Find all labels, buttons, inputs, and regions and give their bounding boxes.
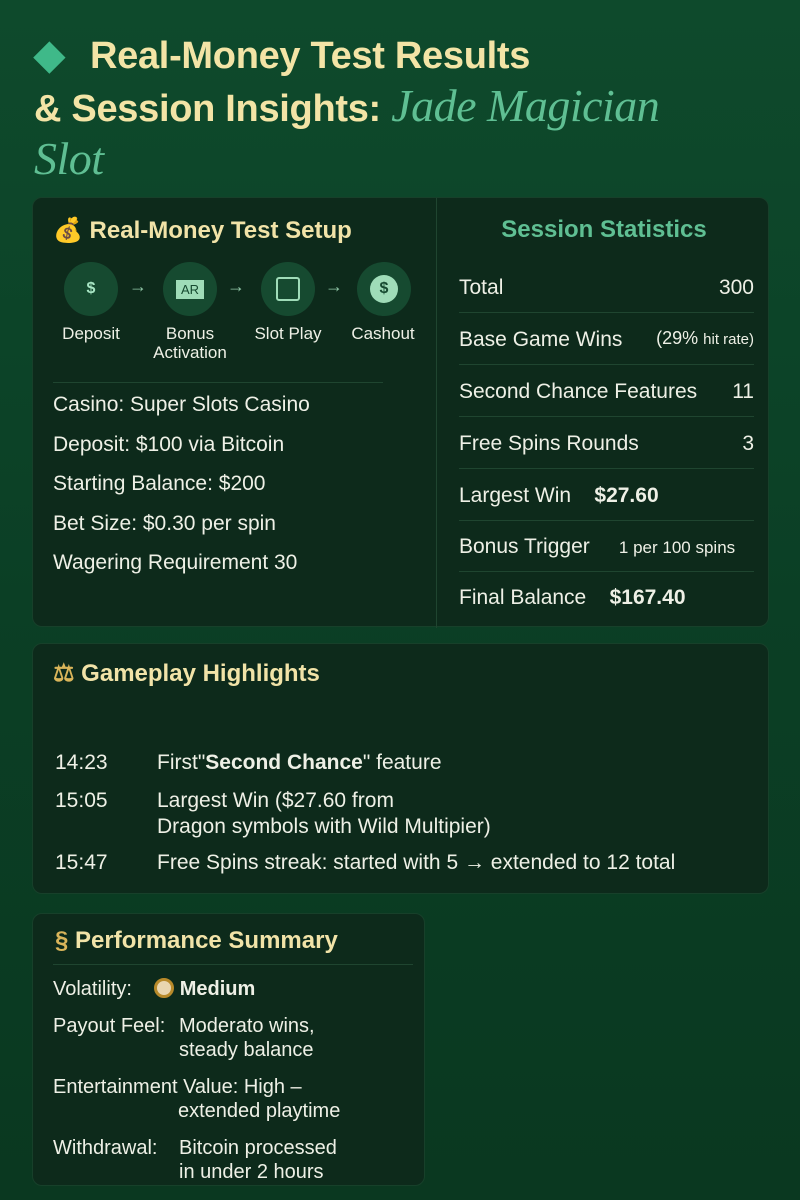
timeline entries — [55, 751, 675, 874]
divider column: session statistics — [436, 198, 770, 628]
process flow: → — [227, 276, 245, 296]
title: ◆ — [34, 33, 64, 77]
timeline entries: First"Second Chance" feature — [157, 751, 442, 774]
title: Slot — [34, 133, 104, 184]
process flow: → — [129, 276, 147, 296]
summary rows: in under 2 hours — [179, 1161, 324, 1183]
summary rows — [53, 964, 413, 1184]
timeline entries: Largest Win ($27.60 from — [157, 789, 394, 812]
process flow — [62, 262, 415, 362]
timeline entries: Free Spins streak: started with 5 → extended to 12 total — [157, 851, 675, 874]
timeline entries: 15:47 — [55, 851, 108, 874]
summary rows: Withdrawal: — [53, 1137, 157, 1159]
summary rows: Moderato wins, — [179, 1015, 315, 1037]
process flow: Slot Play — [254, 324, 322, 343]
timeline entries: 15:05 — [55, 789, 108, 812]
heading: test setup: 💰 Real-Money Test Setup — [53, 217, 352, 244]
divider column: session statistics: Base Game Wins — [459, 328, 622, 351]
divider column: session statistics: Second Chance Features — [459, 380, 697, 403]
title — [33, 33, 659, 184]
heading: gameplay highlights: ⚖ Gameplay Highlights — [53, 660, 320, 687]
setup details: Casino: Super Slots Casino — [53, 393, 310, 416]
process flow: Activation — [153, 343, 227, 362]
divider column: session statistics: Bonus Trigger 1 per 100 spins — [459, 535, 735, 558]
setup details — [53, 382, 383, 582]
divider column: session statistics: Largest Win $27.60 — [459, 484, 659, 507]
panel: test setup and session statistics — [32, 197, 769, 627]
title: & Session Insights: Jade Magician — [34, 80, 659, 131]
setup details: Wagering Requirement 30 — [53, 551, 297, 574]
process flow: AR — [181, 282, 199, 296]
divider column: session statistics: 3 — [742, 432, 754, 455]
divider column: session statistics: 11 — [732, 380, 754, 403]
setup details: Deposit: $100 via Bitcoin — [53, 432, 284, 456]
timeline entries: Dragon symbols with Wild Multipier) — [157, 815, 491, 838]
summary rows: Entertainment Value: High – — [53, 1076, 302, 1098]
summary rows: Volatility: Medium — [53, 978, 255, 1000]
divider column: session statistics: Free Spins Rounds — [459, 432, 639, 455]
process flow: Bonus — [166, 324, 214, 343]
process flow: Deposit — [62, 324, 120, 343]
panel: performance summary — [32, 913, 425, 1186]
setup details: Starting Balance: $200 — [53, 472, 265, 495]
summary rows: steady balance — [179, 1039, 314, 1061]
divider column: session statistics: Total — [459, 276, 503, 299]
process flow: $ — [87, 280, 95, 297]
summary rows: Payout Feel: — [53, 1015, 165, 1037]
title: Real-Money Test Results — [90, 35, 530, 77]
divider column: session statistics: Final Balance $167.40 — [459, 586, 686, 609]
timeline entries: 14:23 — [55, 751, 108, 774]
setup details: Bet Size: $0.30 per spin — [53, 512, 276, 534]
process flow: $ — [380, 280, 388, 297]
summary rows: extended playtime — [178, 1100, 340, 1122]
process flow: Cashout — [351, 324, 415, 343]
panel: gameplay highlights — [32, 643, 769, 894]
summary rows: Bitcoin processed — [179, 1137, 337, 1159]
divider column: session statistics: (29% hit rate) — [656, 328, 754, 348]
divider column: session statistics: 300 — [719, 276, 754, 299]
heading: session statistics: Session Statistics — [501, 216, 707, 243]
process flow: → — [325, 276, 343, 296]
heading: performance summary: § Performance Summary — [55, 927, 338, 954]
